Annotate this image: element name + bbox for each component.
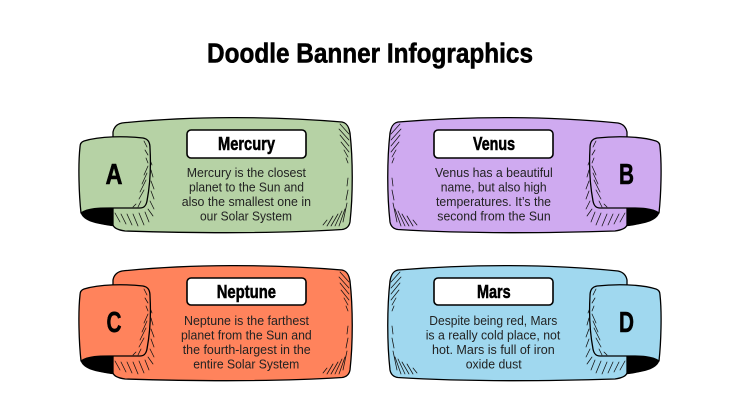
banner shape: purple [388,118,661,233]
heading: Neptune: Neptune [217,281,276,302]
label box: Venus [434,130,553,158]
letter D: D [619,307,634,339]
text: Mars description: is a really cold place, not [426,328,561,342]
text: Mercury description [182,165,311,224]
text: Venus description [435,165,553,224]
banner shape: coral [79,266,352,381]
panel: Venus [388,118,661,233]
text: Neptune description [181,313,312,372]
text: Neptune description: the fourth-largest in the [183,342,311,357]
title: Doodle Banner Infographics [207,38,533,68]
label box: Neptune [187,278,306,305]
text: Mercury description: also the smallest one in [182,194,311,209]
text: Venus description: temperatures. It’s the [436,194,551,209]
letter A: A [106,159,123,191]
banner shape: blue [388,266,661,381]
text: Mars description: oxide dust [466,356,522,372]
label box: Mercury [187,130,306,158]
text: Mercury description: planet to the Sun and [189,180,304,194]
text: Mars description: hot. Mars is full of iron [432,342,555,357]
panel: Mars [388,266,661,381]
heading: Mars: Mars [477,281,511,302]
text: Venus description: second from the Sun [437,208,551,224]
panel: Mercury [79,118,352,233]
text: Neptune description: entire Solar System [193,356,299,372]
letter C: C [106,307,122,339]
text: Mercury description: Mercury is the closest [187,165,306,180]
banner shape: green [79,118,352,233]
letter B: B [619,159,634,191]
heading: Mercury: Mercury [218,133,276,154]
heading: Venus: Venus [473,133,515,154]
text: Mars description [426,313,561,372]
text: Mars description: Despite being red, Mars [429,313,558,328]
text: Neptune description: planet from the Sun and [181,328,312,342]
panel: Neptune [79,266,352,381]
label box: Mars [434,278,553,305]
text: Neptune description: Neptune is the farthest [184,313,309,328]
text: Venus description: name, but also high [441,180,547,194]
text: Venus description: Venus has a beautiful [435,165,553,180]
text: Mercury description: our Solar System [200,208,292,224]
